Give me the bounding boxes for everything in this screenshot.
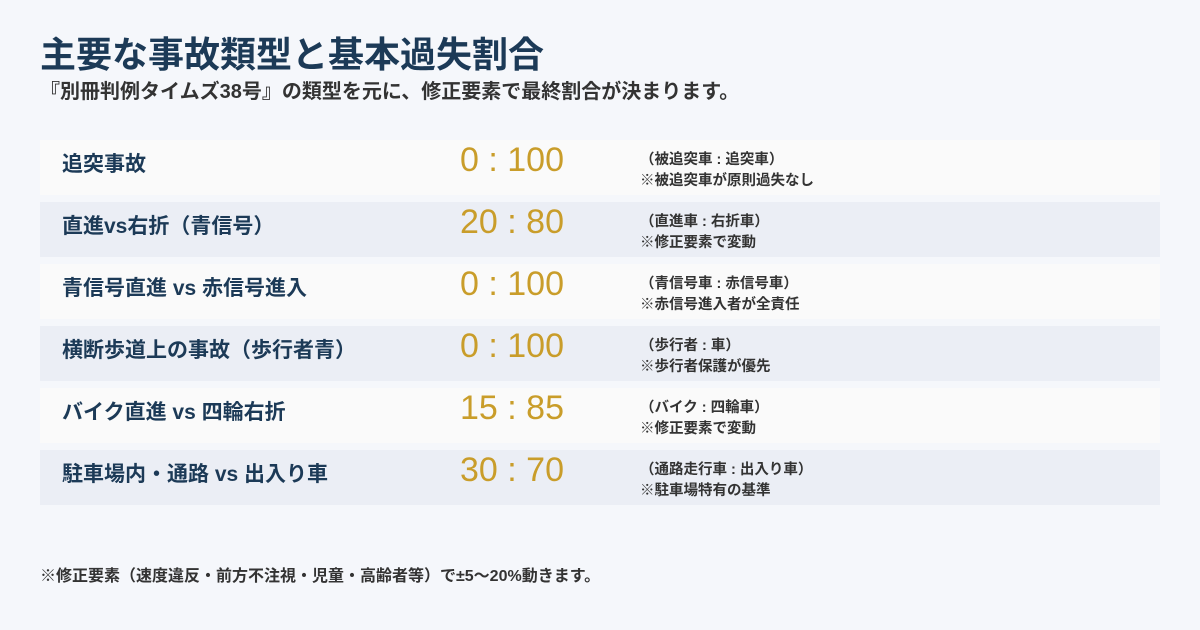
row: straight vs right turn: 20 : 80	[460, 203, 564, 241]
footnote: ※修正要素（速度違反・前方不注視・児童・高齢者等）で±5〜20%動きます。	[40, 568, 600, 585]
row: straight vs right turn: 直進vs右折（青信号）	[62, 215, 274, 238]
row: parking: 駐車場内・通路 vs 出入り車	[62, 463, 328, 486]
subtitle: 『別冊判例タイムズ38号』の類型を元に、修正要素で最終割合が決まります。	[40, 81, 739, 103]
title: 主要な事故類型と基本過失割合	[40, 34, 544, 75]
row: rear-end: （被追突車 : 追突車）	[640, 152, 783, 168]
row: green vs red: （青信号車 : 赤信号車）	[640, 276, 798, 292]
row: rear-end: 0 : 100	[460, 141, 564, 179]
row: bike: （バイク : 四輪車）	[640, 400, 769, 416]
row: crosswalk: ※歩行者保護が優先	[640, 359, 770, 375]
row: green vs red: 0 : 100	[460, 265, 564, 303]
row: green vs red: 青信号直進 vs 赤信号進入	[62, 277, 307, 300]
row: crosswalk: 0 : 100	[460, 327, 564, 365]
row: bike: 15 : 85	[460, 389, 564, 427]
row: crosswalk: （歩行者 : 車）	[640, 338, 740, 354]
row: rear-end	[40, 140, 1160, 195]
row: green vs red	[40, 264, 1160, 319]
row: straight vs right turn	[40, 202, 1160, 257]
row: crosswalk	[40, 326, 1160, 381]
row: bike	[40, 388, 1160, 443]
row: parking: 30 : 70	[460, 451, 564, 489]
row: crosswalk: 横断歩道上の事故（歩行者青）	[62, 339, 356, 362]
row: straight vs right turn: （直進車 : 右折車）	[640, 214, 769, 230]
row: bike: バイク直進 vs 四輪右折	[62, 401, 286, 424]
row: parking: ※駐車場特有の基準	[640, 483, 770, 499]
row: straight vs right turn: ※修正要素で変動	[640, 235, 756, 251]
row: parking: （通路走行車 : 出入り車）	[640, 462, 812, 478]
row: rear-end: ※被追突車が原則過失なし	[640, 173, 814, 189]
row: green vs red: ※赤信号進入者が全責任	[640, 297, 800, 313]
row: rear-end: 追突事故	[62, 153, 146, 176]
row: bike: ※修正要素で変動	[640, 421, 756, 437]
row: parking	[40, 450, 1160, 505]
